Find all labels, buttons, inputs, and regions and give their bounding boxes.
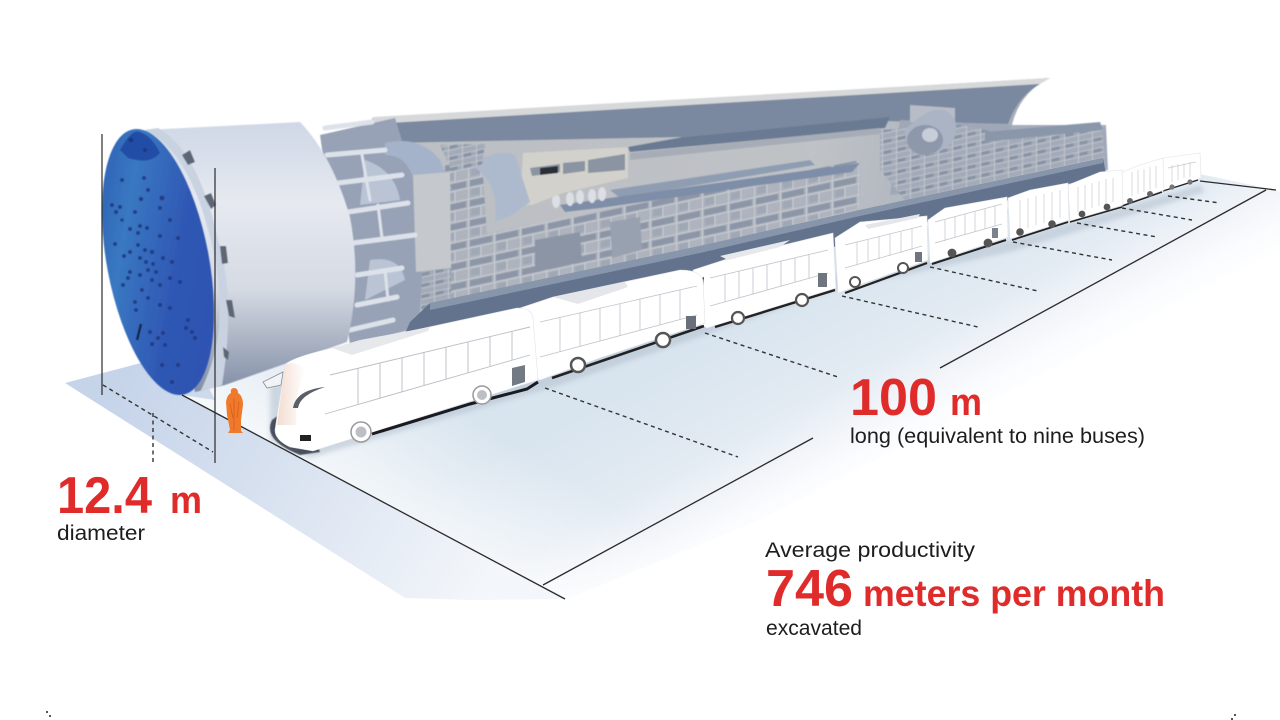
bus 4 <box>835 214 928 293</box>
dimension lines <box>102 134 1276 599</box>
bus 1 shadow <box>270 400 320 455</box>
control cabin <box>520 147 628 205</box>
bus 9 <box>1163 153 1201 191</box>
rooftop walkway 2 <box>560 163 860 212</box>
cutter head <box>83 120 233 404</box>
dashed measure lines <box>103 196 1220 465</box>
bus 1 front panel <box>277 363 305 425</box>
bus 3 <box>693 233 836 328</box>
machine cutaway: back-up gantries inside tunnel shell <box>320 78 1108 345</box>
bus 6 <box>1008 183 1069 240</box>
shield struts <box>325 122 415 330</box>
lower storage block <box>535 232 582 272</box>
bus 2 <box>520 270 705 380</box>
shield body <box>145 122 355 392</box>
upper shell strip <box>373 78 1050 124</box>
cutter slot <box>137 324 141 340</box>
stat: 12.4 m diameter: m <box>170 480 202 522</box>
rear gantry <box>880 125 1105 200</box>
stat: average productivity: 746 <box>766 560 853 618</box>
stat: 100 m long: m <box>950 382 982 424</box>
ring brackets <box>182 150 235 360</box>
stat: average productivity: meters per month <box>863 573 1165 614</box>
icon: orange person for scale <box>226 388 243 433</box>
stat: average productivity: Average productivity <box>765 539 976 562</box>
cutter tool holes <box>110 138 197 384</box>
bus 7 <box>1068 170 1123 222</box>
upper pipe <box>628 117 890 152</box>
stat: 12.4 m diameter: 12.4 <box>57 467 152 525</box>
stat: average productivity: excavated <box>766 617 862 640</box>
dome 2 <box>470 153 530 222</box>
bus 1 <box>263 308 538 455</box>
tunnel back wall <box>360 78 1108 340</box>
stat: average productivity <box>765 539 1165 640</box>
rear dome dish <box>905 110 956 155</box>
rooftop walkway 1 <box>610 160 815 198</box>
shield front ring <box>145 128 228 392</box>
frame behind dome <box>440 144 485 172</box>
windshield and mirror <box>293 387 325 408</box>
cutter dark crown <box>120 131 160 161</box>
windows <box>325 327 530 414</box>
gantry block <box>413 172 451 272</box>
bus 8 <box>1122 158 1164 206</box>
stat: 12.4 m diameter <box>57 467 202 545</box>
headlight <box>300 435 311 441</box>
bus 1 underside shadow <box>372 382 538 434</box>
roof unit <box>332 327 430 355</box>
lower rim tube <box>400 158 1106 345</box>
stat: 12.4 m diameter: diameter <box>57 522 145 545</box>
engine grille <box>512 365 525 386</box>
gas tanks <box>552 187 606 208</box>
stat: 100 m long: long (equivalent to nine buses) <box>850 425 1145 448</box>
dome 1 <box>385 141 452 190</box>
front gantry lattice <box>445 160 492 322</box>
rear wall shadow <box>890 120 1106 195</box>
upper shell dark band <box>373 84 1040 143</box>
bus 5 <box>928 197 1008 264</box>
ground plane <box>65 172 1280 600</box>
bus 1 body <box>275 308 538 451</box>
second bus mirror <box>263 372 283 388</box>
crop marks <box>46 711 1236 720</box>
stat: 100 m long: 100 <box>850 369 937 427</box>
stat: 100 m long <box>850 369 1145 448</box>
roof unit <box>553 282 628 304</box>
strut frame area <box>320 118 452 345</box>
